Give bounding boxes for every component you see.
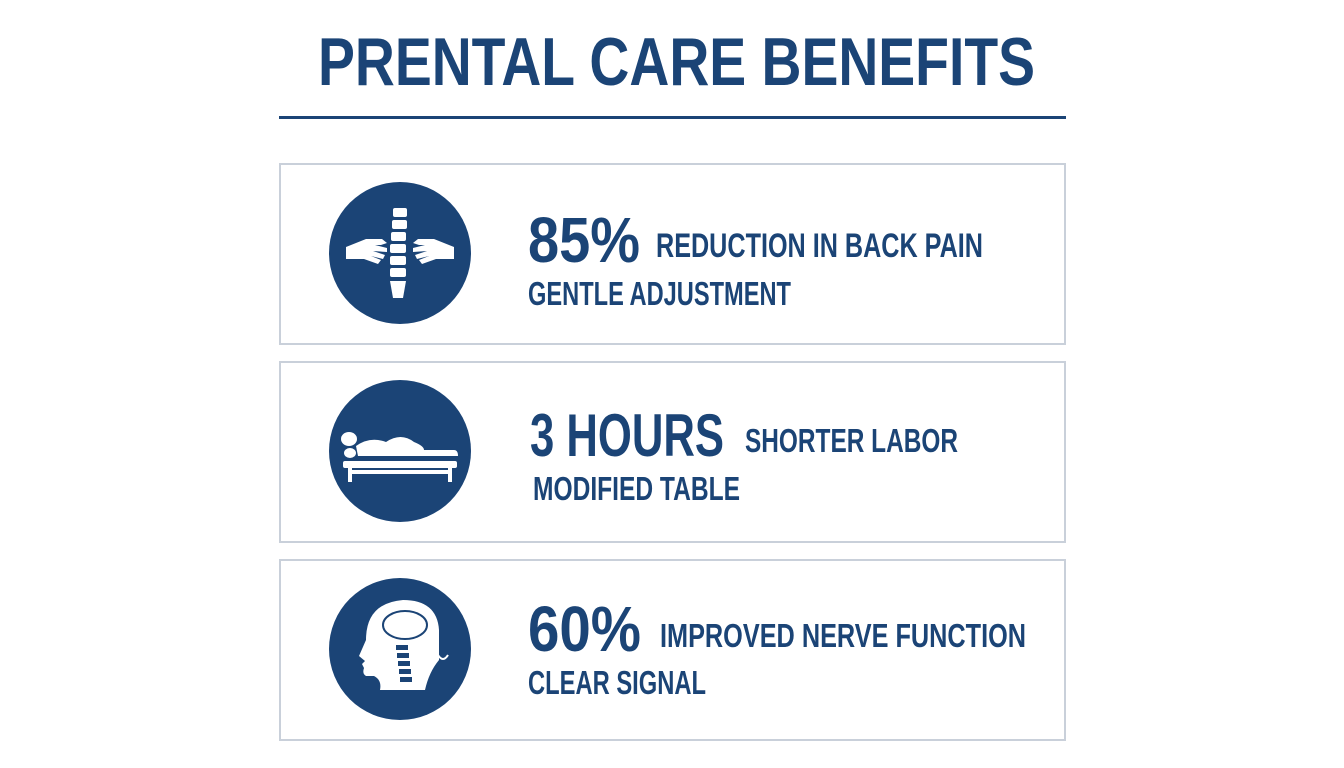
panel: nerve — [280, 560, 1065, 740]
title — [279, 24, 1066, 119]
icon: hands and spine — [329, 182, 471, 324]
icon: woman on table — [329, 380, 471, 522]
stat text: 60% — [528, 593, 641, 665]
panel: labor — [280, 362, 1065, 542]
stat text: SHORTER LABOR — [745, 422, 958, 459]
stat text: REDUCTION IN BACK PAIN — [656, 227, 983, 265]
icon: head with brain and spine — [329, 578, 471, 720]
stat text: GENTLE ADJUSTMENT — [528, 275, 791, 312]
panel: back pain — [280, 164, 1065, 344]
stat text: CLEAR SIGNAL — [528, 664, 706, 701]
stat text: IMPROVED NERVE FUNCTION — [660, 617, 1026, 654]
stat text: 3 HOURS — [530, 402, 724, 469]
stat text: MODIFIED TABLE — [533, 470, 740, 507]
stat text — [528, 204, 983, 312]
stat text: 85% — [528, 204, 640, 276]
stat text — [530, 402, 958, 507]
title: PRENTAL CARE BENEFITS — [318, 24, 1035, 100]
stat text — [528, 593, 1026, 701]
